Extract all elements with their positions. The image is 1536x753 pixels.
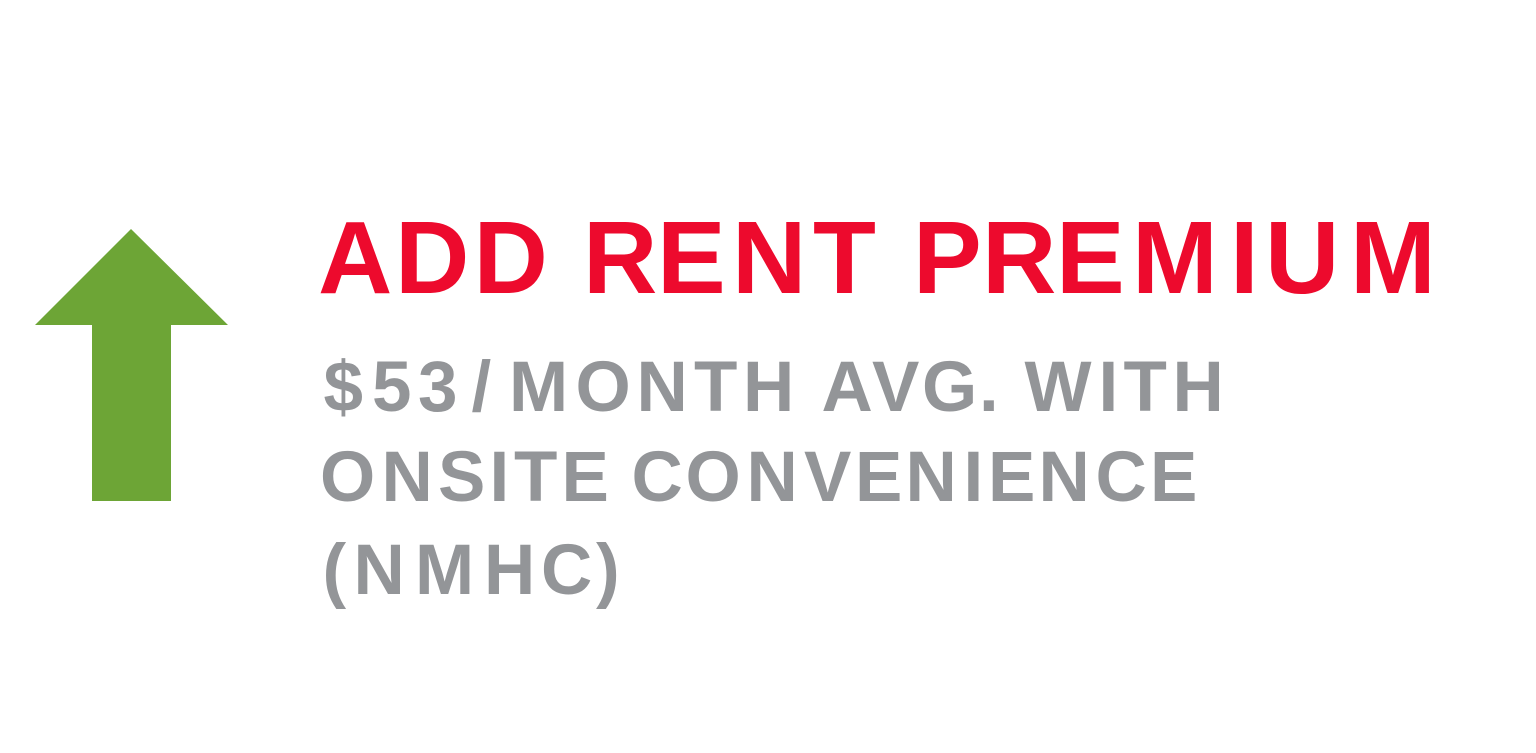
icon: green up arrow: [35, 229, 228, 501]
text line 1: $53/MONTH AVG. WITH: [324, 348, 1224, 427]
text line 2: ONSITE CONVENIENCE: [320, 438, 1197, 517]
text block: rent premium detail: [320, 348, 1224, 610]
text line 3: (NMHC): [322, 531, 620, 610]
heading: add rent premium: ADD RENT PREMIUM: [318, 200, 1436, 315]
